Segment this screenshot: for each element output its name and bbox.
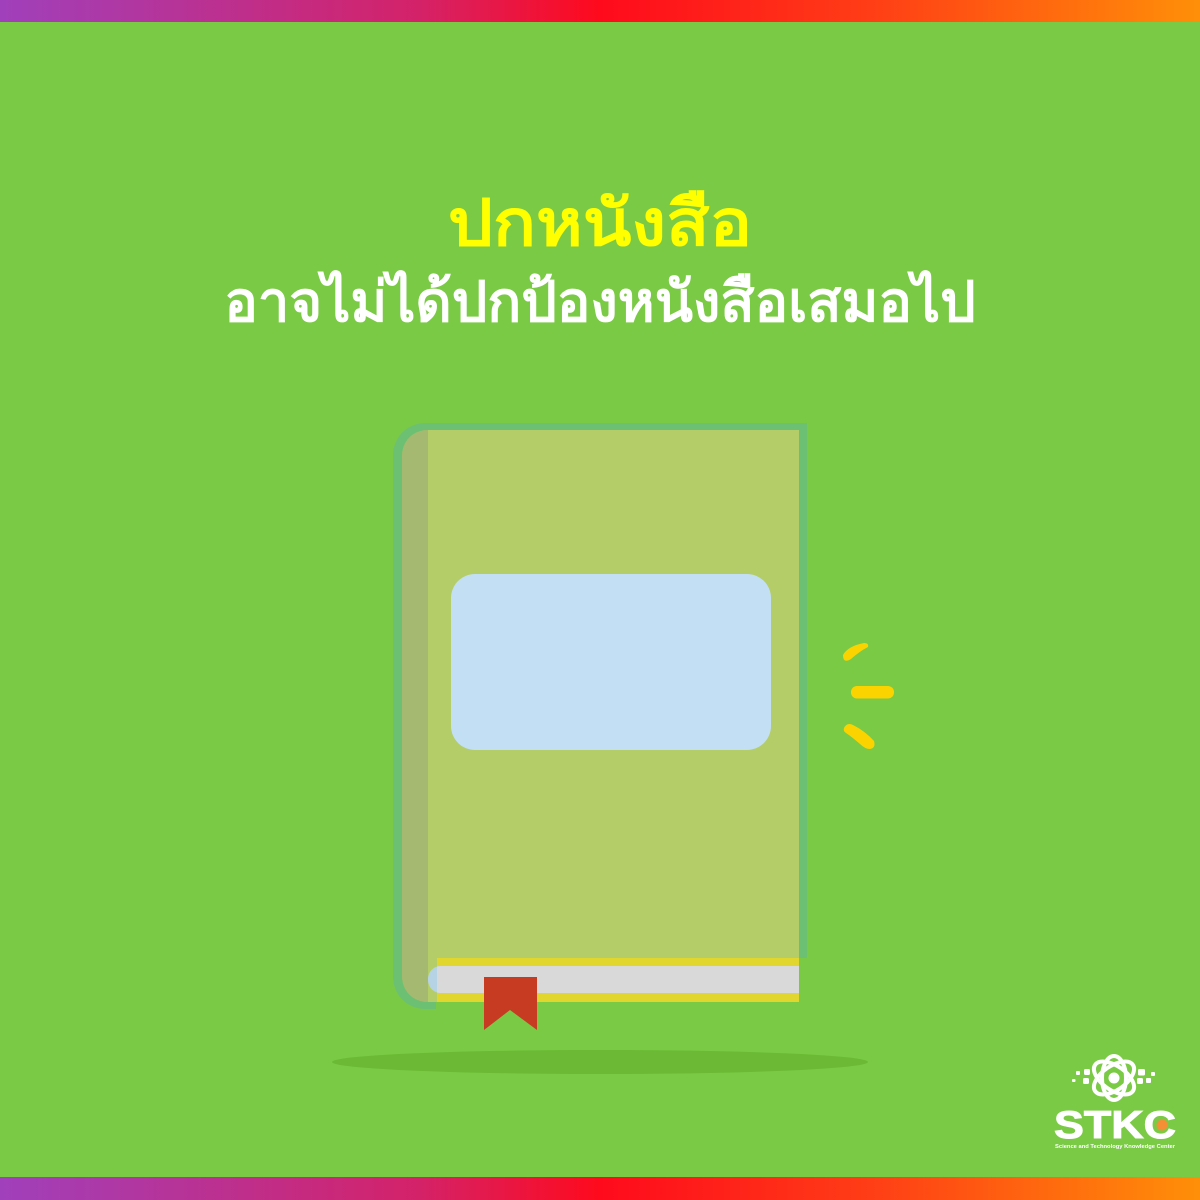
top gradient bar — [0, 0, 1200, 22]
subtitle: white heading: อาจไม่ได้ปกป้องหนังสือเสมอไป — [224, 270, 976, 333]
logo orange dot — [1156, 1120, 1168, 1130]
book spine — [402, 430, 428, 1002]
cover label — [451, 574, 771, 750]
book cover outline — [393, 423, 807, 1009]
bookmark ribbon — [484, 977, 537, 1030]
pages white strip — [437, 966, 799, 993]
book shadow — [332, 1050, 868, 1074]
bottom gradient bar — [0, 1177, 1200, 1200]
sparkle marks — [843, 643, 894, 749]
logo wordmark: STKC — [1054, 1104, 1176, 1147]
title: yellow heading: ปกหนังสือ — [448, 187, 752, 259]
logo atom icon — [1072, 1055, 1155, 1101]
logo tagline: Science and Technology Knowledge Center — [1055, 1144, 1175, 1150]
logo: STKC — [1054, 1054, 1176, 1150]
book cover face — [428, 430, 799, 1002]
pages band — [437, 958, 799, 1002]
pages rounded cap — [428, 966, 442, 993]
